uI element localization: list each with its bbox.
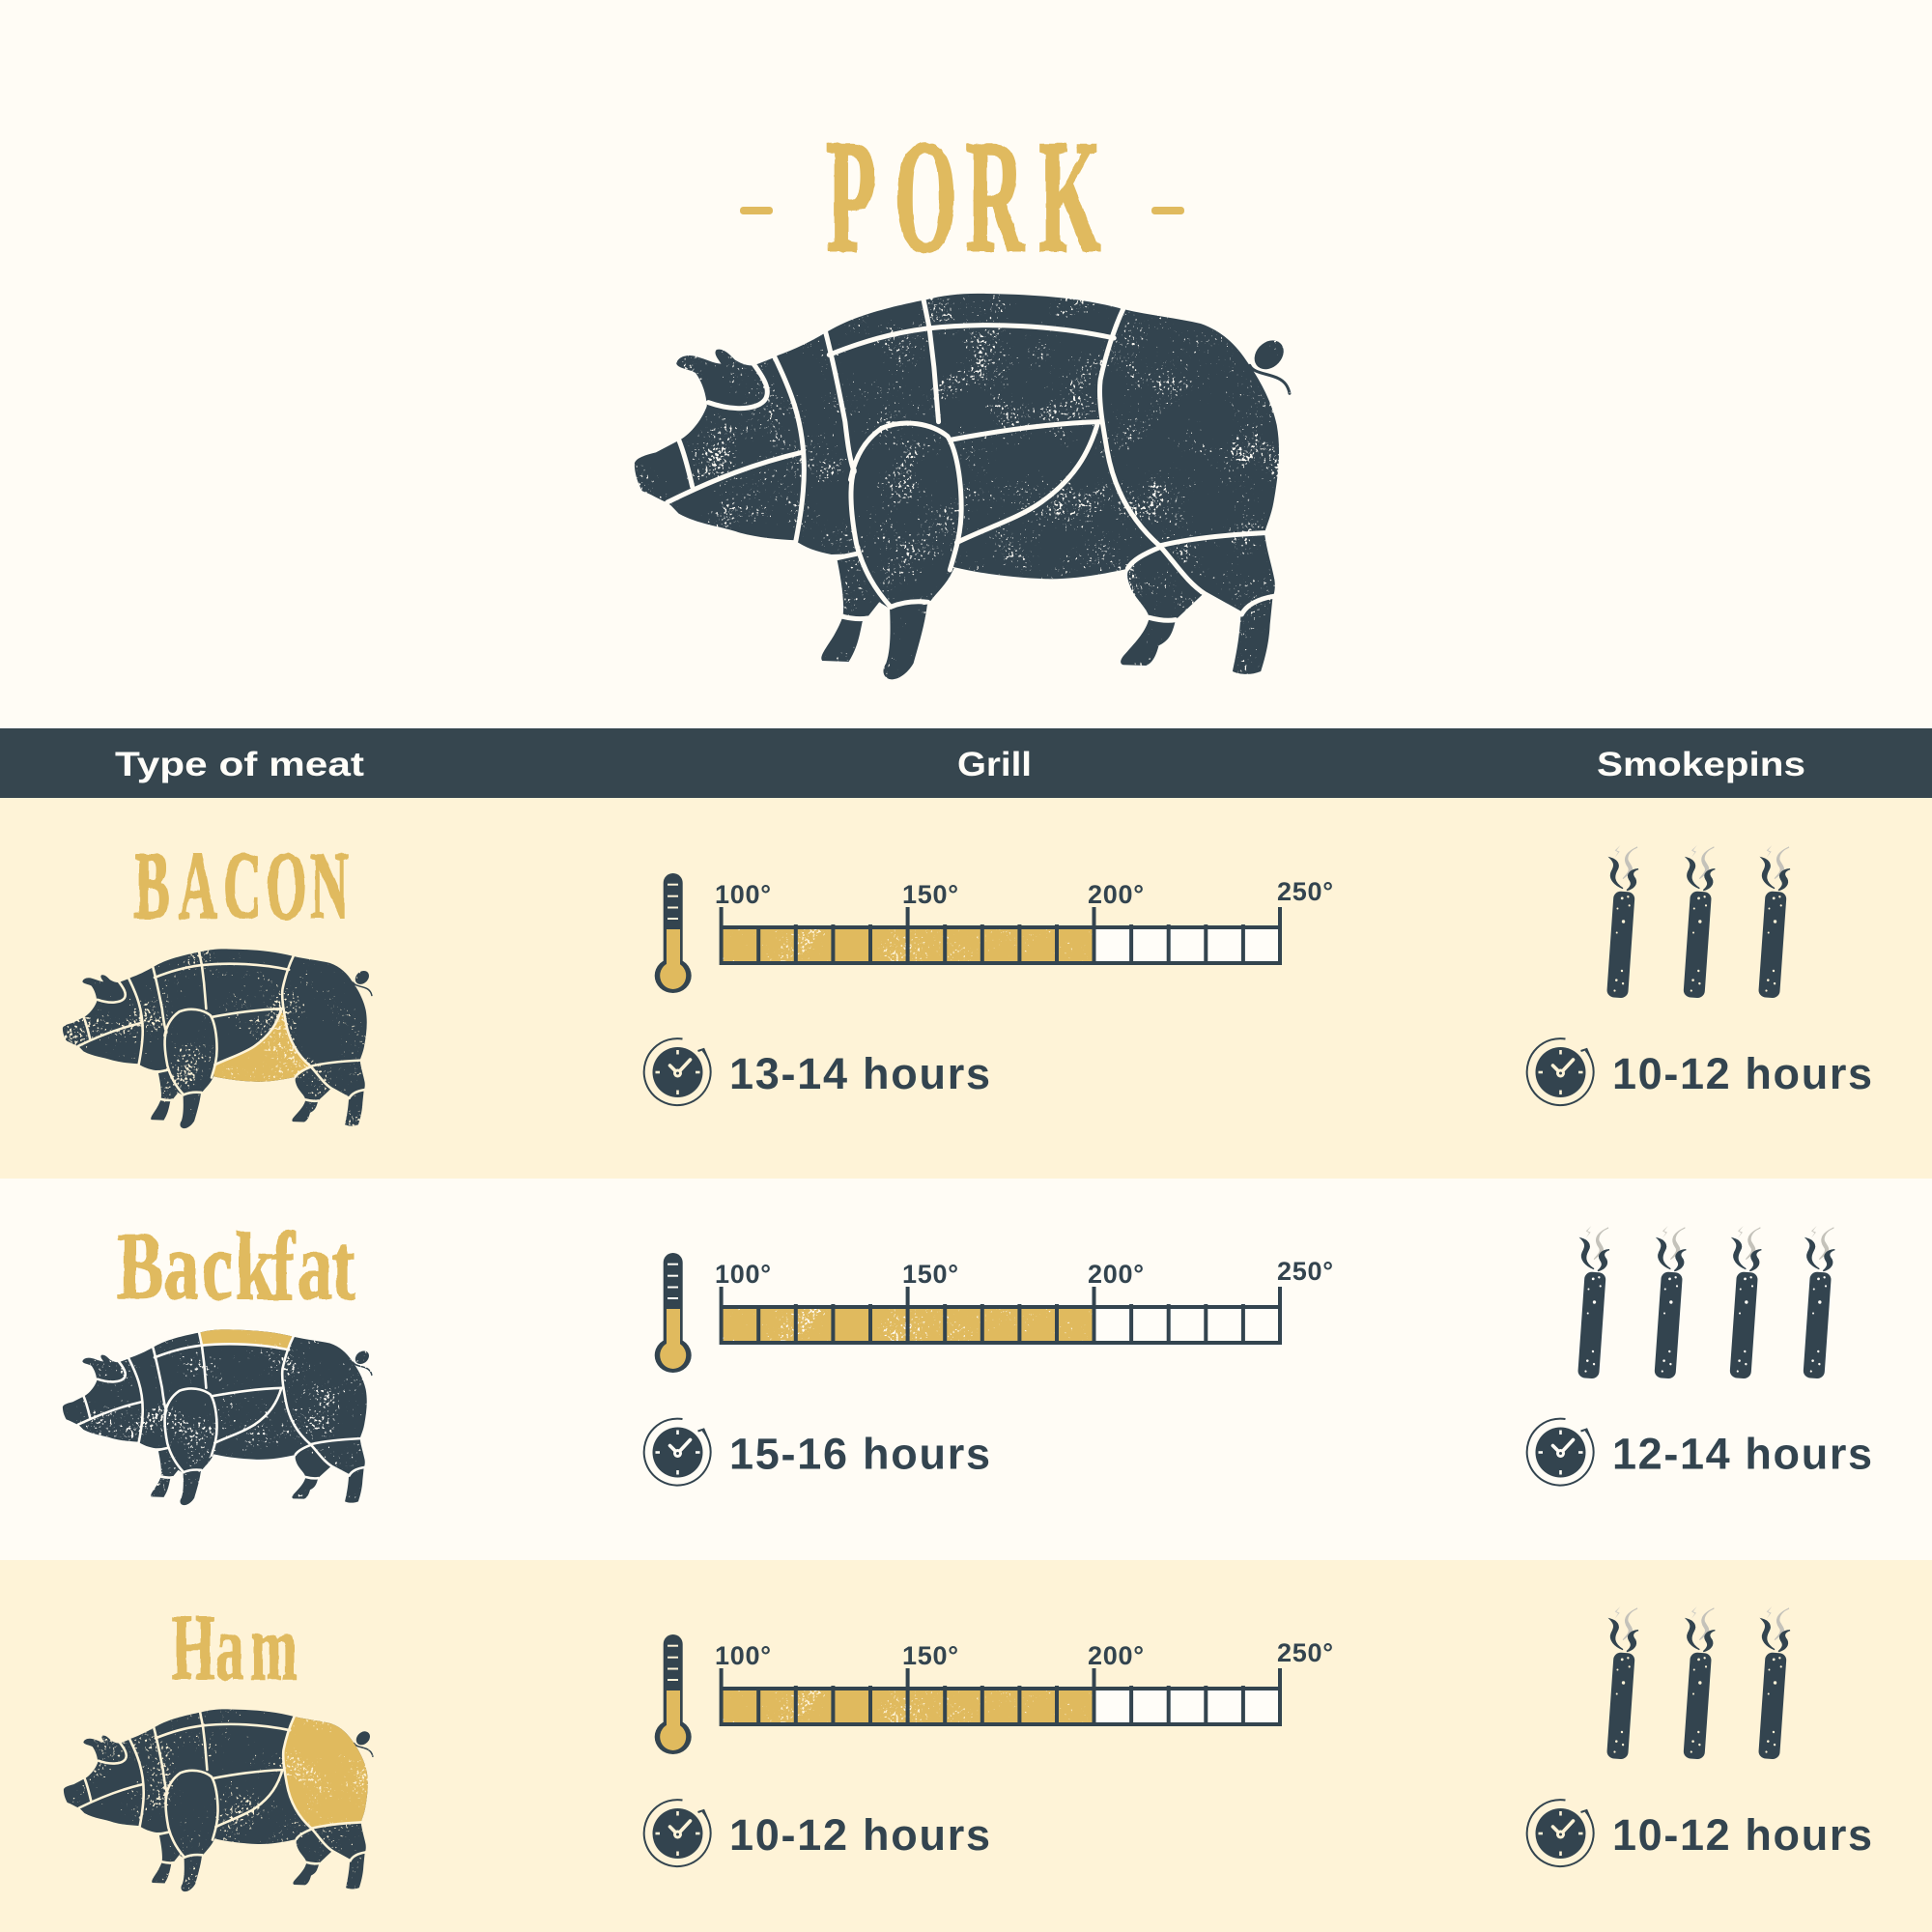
temperature scale: 150° — [902, 1641, 958, 1670]
smokepin time — [1527, 1419, 1872, 1486]
thermometer — [655, 1634, 692, 1754]
table header bar: Grill — [957, 746, 1032, 783]
grill time: 10-12 hours — [729, 1810, 990, 1860]
temperature scale: 250° — [1277, 1257, 1333, 1286]
table header bar: Smokepins — [1597, 746, 1805, 783]
table header bar — [0, 728, 1932, 798]
temperature scale: 200° — [1088, 1260, 1144, 1289]
temperature scale — [715, 1638, 1333, 1724]
title: PORK — [827, 108, 1101, 286]
heading: ham: Ham — [172, 1597, 298, 1700]
row: backfat — [0, 1179, 1932, 1560]
pig with backfat highlighted — [63, 1329, 372, 1505]
temperature scale: 150° — [902, 880, 958, 909]
temperature scale — [715, 1257, 1333, 1343]
title — [740, 108, 1184, 286]
temperature scale: 100° — [715, 1260, 771, 1289]
temperature scale: 250° — [1277, 1638, 1333, 1667]
smokepin time: 10-12 hours — [1612, 1810, 1872, 1860]
thermometer — [655, 873, 692, 993]
temperature scale: 250° — [1277, 877, 1333, 906]
temperature scale: 100° — [715, 1641, 771, 1670]
temperature scale: 200° — [1088, 1641, 1144, 1670]
smokepin time — [1527, 1038, 1872, 1105]
main pig with butcher cuts — [635, 294, 1290, 679]
smokepin time: 12-14 hours — [1612, 1430, 1872, 1478]
grill time — [644, 1419, 990, 1486]
table header bar: Type of meat — [115, 746, 364, 783]
smokepins — [1606, 1606, 1790, 1759]
grill time: 13-14 hours — [729, 1049, 990, 1098]
pig with ham highlighted — [64, 1709, 373, 1891]
temperature scale: 200° — [1088, 880, 1144, 909]
grill time — [644, 1038, 990, 1105]
smokepin time — [1527, 1800, 1872, 1866]
grill time: 15-16 hours — [729, 1430, 990, 1478]
row: bacon — [0, 798, 1932, 1179]
pig with belly highlighted — [63, 949, 372, 1128]
smokepins — [1577, 1226, 1834, 1378]
smokepins — [1606, 845, 1790, 998]
heading: bacon: BACON — [134, 833, 349, 939]
temperature scale: 100° — [715, 880, 771, 909]
temperature scale — [715, 877, 1333, 963]
heading: backfat: Backfat — [118, 1211, 355, 1320]
temperature scale: 150° — [902, 1260, 958, 1289]
grill time — [644, 1800, 990, 1866]
smokepin time: 10-12 hours — [1612, 1049, 1872, 1098]
row: ham — [0, 1560, 1932, 1932]
thermometer — [655, 1253, 692, 1373]
